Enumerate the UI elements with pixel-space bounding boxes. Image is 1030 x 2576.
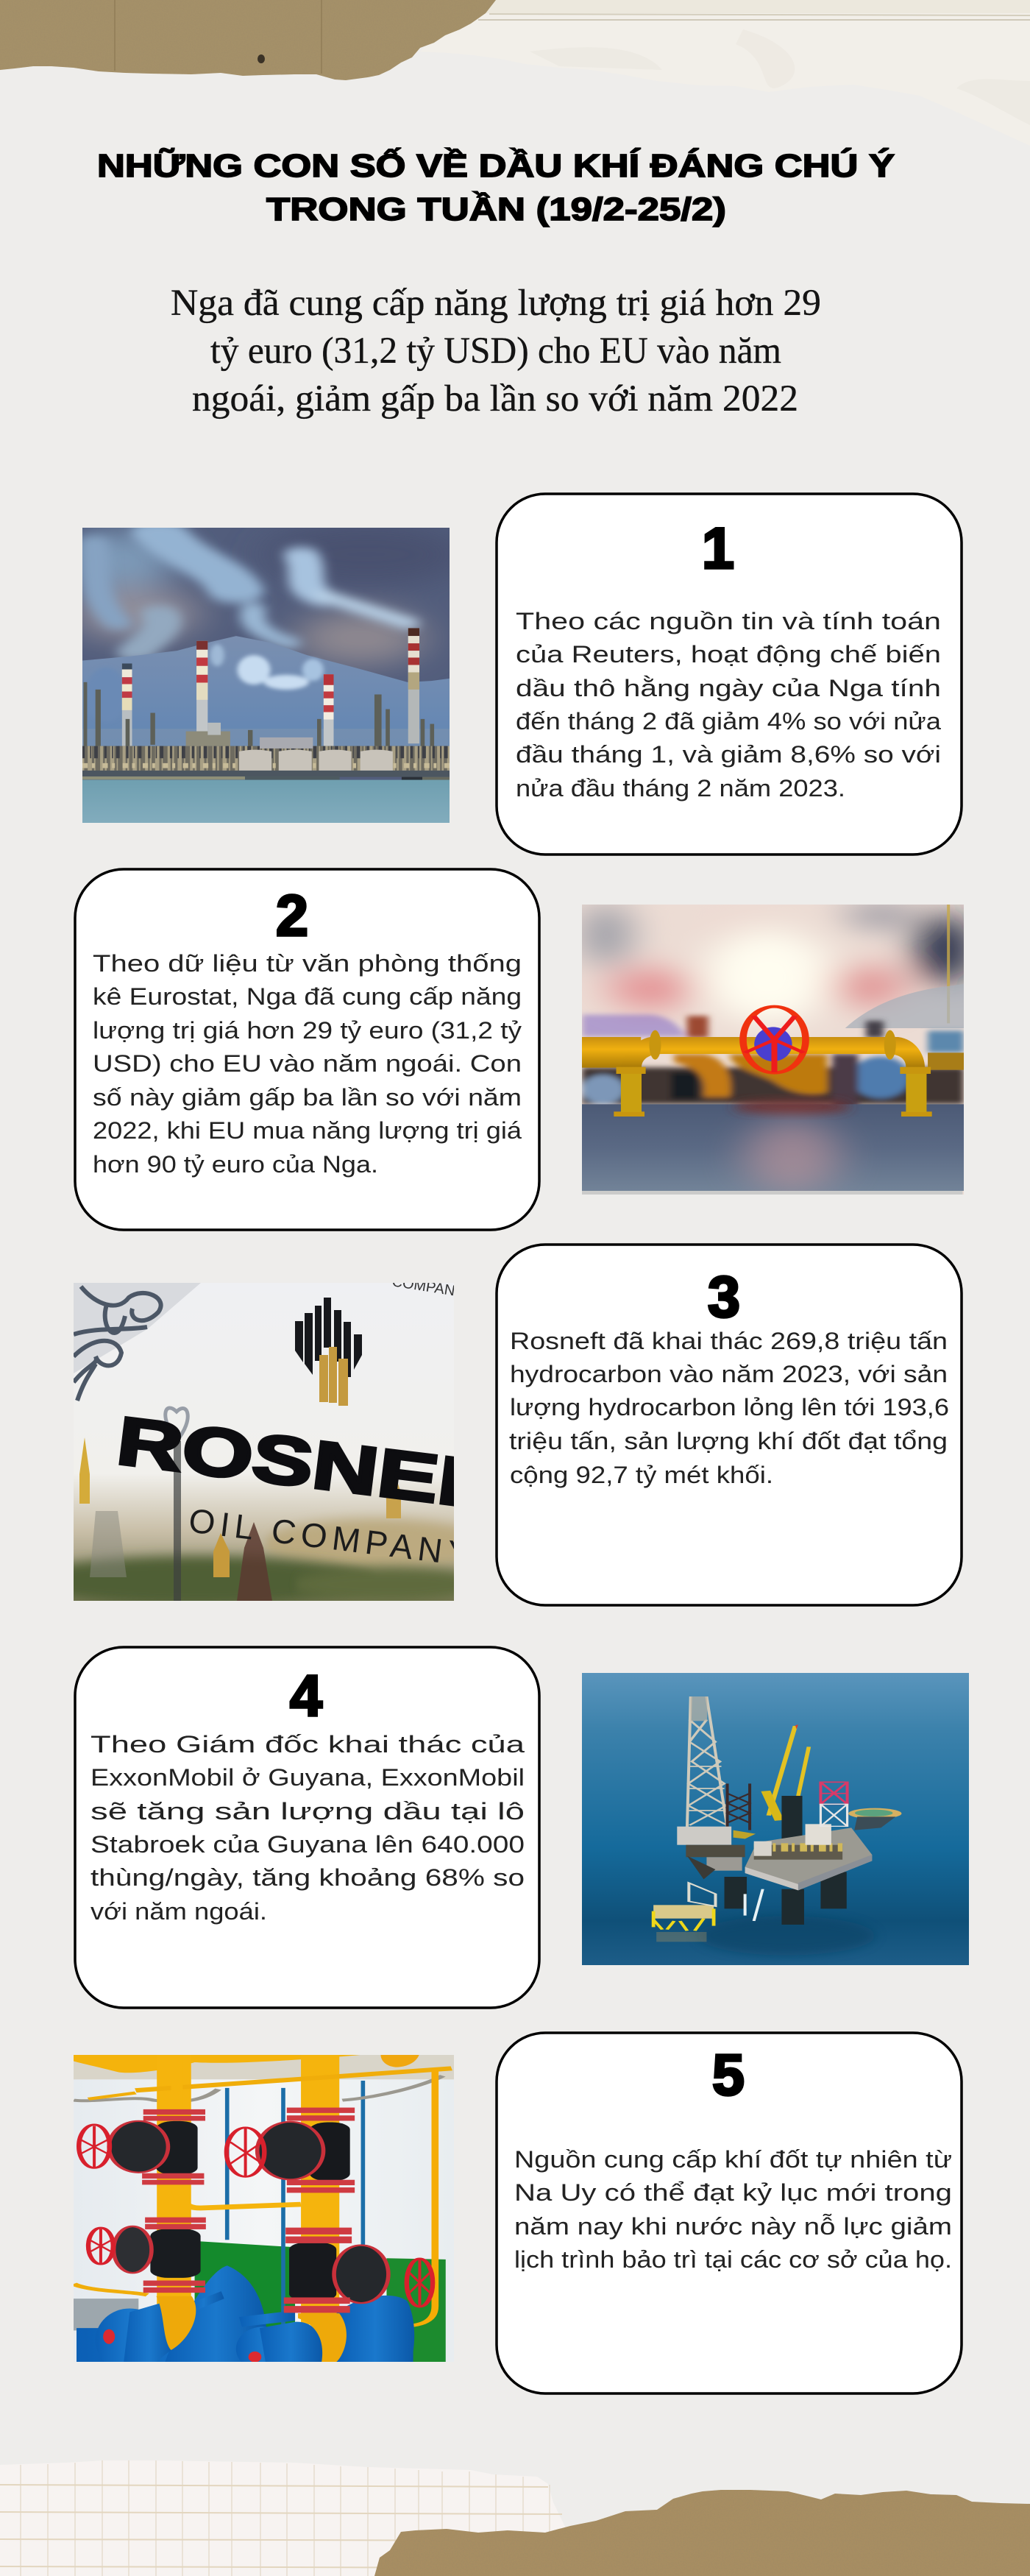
- Rosneft logo: [295, 1298, 362, 1406]
- black valve bodies and red flanges: [109, 2121, 388, 2303]
- legs: [725, 1796, 847, 1925]
- card 2 text: kê Eurostat, Nga đã cung cấp năng: [93, 983, 522, 1010]
- derrick tower: [687, 1696, 728, 1827]
- wrought-iron reflection: [74, 1283, 201, 1401]
- card 5: [497, 2033, 962, 2393]
- card 3 text: cộng 92,7 tỷ mét khối.: [510, 1462, 773, 1488]
- chimneys: [122, 628, 419, 768]
- card 1 text: đầu tháng 1, và giảm 8,6% so với: [516, 741, 941, 768]
- card 1 text: của Reuters, hoạt động chế biến: [516, 641, 941, 668]
- card 1 text: nửa đầu tháng 2 năm 2023.: [516, 775, 845, 802]
- card 5 box: [497, 2033, 962, 2393]
- card 4 text: Stabroek của Guyana lên 640.000: [90, 1831, 525, 1858]
- card 1 text: [516, 608, 941, 802]
- photo: Rosneft oil company sign: [74, 1273, 553, 1601]
- card 3 box: [497, 1245, 962, 1605]
- card 1: [497, 494, 962, 854]
- card 2 text: số này giảm gấp ba lần so với năm: [93, 1084, 522, 1111]
- card 2 text: USD) cho EU vào năm ngoái. Con: [93, 1050, 522, 1077]
- card 3 text: Rosneft đã khai thác 269,8 triệu tấn: [510, 1328, 948, 1354]
- card 4 text: ExxonMobil ở Guyana, ExxonMobil: [90, 1764, 525, 1791]
- card 3 text: lượng hydrocarbon lỏng lên tới 193,6: [510, 1394, 949, 1420]
- photo: offshore oil rig: [582, 1673, 969, 1965]
- card 4 box: [75, 1647, 539, 2008]
- distant reflection: domes and palace: [22, 1408, 486, 1606]
- platform deck: [677, 1824, 872, 1890]
- card 1 text: đến tháng 2 đã giảm 4% so với nửa: [516, 708, 941, 735]
- OIL COMPANY lettering: OIL COMPANY: [187, 1501, 477, 1574]
- card 4 text: [90, 1731, 525, 1925]
- blue pumps: [77, 2265, 414, 2372]
- torn kraft paper: bottom right: [374, 2490, 1030, 2576]
- torn paper: top right: [420, 0, 1030, 146]
- card 2: [75, 869, 539, 1230]
- card 1 number: 1: [702, 515, 734, 581]
- blurred background plant: [582, 1015, 964, 1109]
- card 2 number: 2: [276, 882, 308, 948]
- card 4 number: 4: [290, 1663, 322, 1728]
- subtitle: tỷ euro (31,2 tỷ USD) cho EU vào năm: [210, 330, 781, 372]
- green wall and blue wires: [74, 2076, 446, 2362]
- card 2 text: Theo dữ liệu từ văn phòng thống: [93, 950, 522, 977]
- yellow pipes: [74, 2055, 452, 2326]
- card 5 text: Na Uy có thể đạt kỷ lục mới trong: [514, 2179, 952, 2206]
- card 4 text: sẽ tăng sản lượng dầu tại lô: [90, 1798, 525, 1825]
- card 5 text: Nguồn cung cấp khí đốt tự nhiên từ: [514, 2146, 952, 2173]
- yellow cranes: [769, 1726, 795, 1816]
- card 3 text: triệu tấn, sản lượng khí đốt đạt tổng: [509, 1428, 948, 1454]
- card 2 text: hơn 90 tỷ euro của Nga.: [93, 1151, 378, 1178]
- photo: yellow gas pipes, red valves, blue pumps: [74, 2055, 454, 2362]
- title: [97, 146, 895, 227]
- card 1 text: Theo các nguồn tin và tính toán: [516, 608, 941, 634]
- card 4 text: Theo Giám đốc khai thác của: [90, 1731, 525, 1758]
- red handwheels: [79, 2125, 433, 2307]
- card 5 text: [514, 2146, 952, 2273]
- yellow module with reflection: [653, 1883, 715, 1942]
- photo: yellow gas pipeline with red valve: [582, 905, 964, 1195]
- photo: refinery with smoke: [82, 528, 450, 823]
- small COMPANY reflection text: COMPANY: [391, 1273, 466, 1301]
- card 4 text: thùng/ngày, tăng khoảng 68% so: [90, 1864, 525, 1891]
- refinery base: [82, 682, 450, 782]
- ROSNEFT sign lettering: ROSNEFT: [113, 1404, 553, 1531]
- title: NHỮNG CON SỐ VỀ DẦU KHÍ ĐÁNG CHÚ Ý: [97, 146, 895, 184]
- card 1 box: [497, 494, 962, 854]
- subtitle: ngoái, giảm gấp ba lần so với năm 2022: [192, 378, 798, 420]
- card 1 text: dầu thô hằng ngày của Nga tính: [516, 675, 941, 701]
- title: TRONG TUẦN (19/2-25/2): [266, 191, 726, 227]
- card 3 text: [509, 1328, 949, 1488]
- torn kraft paper: top left: [0, 0, 496, 80]
- card 3: [497, 1245, 962, 1605]
- card 2 box: [75, 869, 539, 1230]
- card 2 text: lượng trị giá hơn 29 tỷ euro (31,2 tỷ: [93, 1017, 522, 1044]
- card 3 number: 3: [708, 1264, 740, 1329]
- red derrick and helideck: [820, 1782, 901, 1830]
- torn grid paper: bottom left: [0, 2460, 565, 2576]
- card 3 text: hydrocarbon vào năm 2023, với sản: [510, 1361, 948, 1387]
- card 2 text: 2022, khi EU mua năng lượng trị giá: [93, 1117, 522, 1144]
- card 2 text: [93, 950, 522, 1178]
- card 4: [75, 1647, 539, 2008]
- card 5 text: lịch trình bảo trì tại các cơ sở của họ.: [514, 2246, 952, 2273]
- subtitle: Nga đã cung cấp năng lượng trị giá hơn 29: [171, 283, 821, 324]
- card 4 text: với năm ngoái.: [90, 1898, 267, 1925]
- subtitle: [171, 283, 821, 420]
- card 5 number: 5: [712, 2042, 745, 2107]
- card 5 text: năm nay khi nước này nỗ lực giảm: [514, 2213, 952, 2240]
